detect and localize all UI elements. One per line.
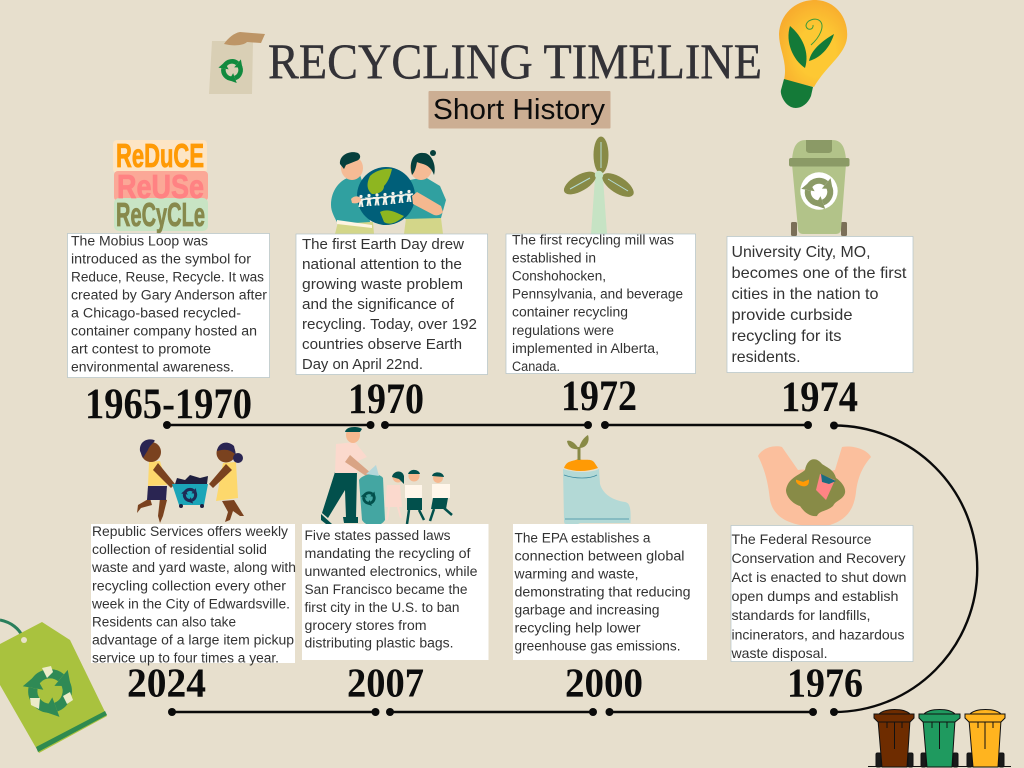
year: 1974: 1974 (781, 374, 858, 421)
panel: 2000 (513, 524, 707, 660)
icon: reduce reuse recycle sticker: ReDuCE (116, 137, 204, 174)
panel: 1976: The Federal Resource (732, 531, 872, 547)
panel: 1976 (730, 526, 913, 662)
panel: 1965-1970: introduced as the symbol for (71, 252, 252, 266)
panel: 1976: waste disposal. (730, 645, 828, 661)
panel: 1976: open dumps and establish (732, 588, 898, 604)
panel: 1972: Canada. (512, 359, 560, 374)
panel: 1970 (296, 234, 488, 374)
subtitle: short history: Short History (433, 94, 606, 126)
panel: 2024: week in the City of Edwardsville. (91, 596, 290, 612)
panel: 1974: residents. (732, 349, 800, 366)
panel: 2024: recycling collection every other (92, 578, 287, 594)
panel: 2007: mandating the recycling of (304, 546, 471, 561)
panel: 1965-1970: environmental awareness. (71, 360, 234, 374)
panel: 2007: San Francisco became the (304, 582, 468, 597)
icon: man and children collecting bottles (321, 427, 452, 526)
icon: reduce reuse recycle sticker: ReCyCLe (116, 196, 205, 233)
panel: 2024: Residents can also take (92, 614, 236, 630)
panel: 1976: incinerators, and hazardous (732, 626, 904, 642)
year: 1965-1970: 1965-1970 (85, 381, 252, 428)
panel: 2024: collection of residential solid (92, 542, 267, 557)
panel: 2000: garbage and increasing (514, 603, 660, 618)
panel: 1974: cities in the nation to (732, 286, 879, 303)
panel: 1970: countries observe Earth (302, 337, 462, 353)
year: 1972: 1972 (561, 373, 637, 420)
year: 1976: 1976 (787, 660, 863, 706)
panel: 1970: The first Earth Day drew (302, 237, 464, 253)
panel: 1972: established in (512, 250, 596, 265)
panel: 1970: and the significance of (302, 297, 455, 313)
panel: 1970: national attention to the (302, 257, 462, 273)
icon: wind turbine (560, 136, 637, 234)
title: RECYCLING TIMELINE (268, 33, 762, 89)
year: 2024: 2024 (127, 660, 206, 706)
panel: 2000: recycling help lower (514, 621, 641, 636)
panel: 1965-1970: a Chicago-based recycled- (71, 306, 241, 320)
panel: 1974: becomes one of the first (732, 265, 907, 282)
panel: 1976: standards for landfills, (732, 607, 870, 623)
panel: 1972: container recycling (512, 305, 628, 320)
icon: two kids carrying a recycling basket (137, 439, 244, 523)
panel: 1965-1970 (68, 234, 270, 378)
panel: 2007: Five states passed laws (304, 528, 451, 543)
panel: 1972: Pennsylvania, and beverage (512, 287, 683, 302)
timeline: connectors and curve (163, 421, 977, 716)
panel: 1965-1970: container company hosted an (71, 324, 257, 338)
panel: 1976: Act is enacted to shut down (732, 569, 906, 585)
panel: 2024: Republic Services offers weekly (92, 524, 288, 539)
icon: boot with seedling (563, 435, 631, 524)
icon: two people holding the earth (331, 150, 446, 234)
panel: 1965-1970: art contest to promote (71, 342, 211, 356)
icon: green recycling bin (789, 140, 850, 236)
panel: 2000: The EPA establishes a (514, 531, 651, 546)
panel: 1965-1970: The Mobius Loop was (71, 234, 208, 248)
panel: 1976: Conservation and Recovery (732, 550, 906, 566)
panel: 1974 (727, 236, 913, 372)
panel: 1972: Conshohocken, (512, 268, 606, 284)
panel: 1974: University City, MO, (732, 244, 870, 261)
panel: 1972: The first recycling mill was (512, 232, 674, 247)
panel: 2024: waste and yard waste, along with (91, 560, 296, 575)
panel: 1974: recycling for its (732, 328, 842, 345)
panel: 2007: unwanted electronics, while (304, 564, 478, 579)
panel: 2007: distributing plastic bags. (304, 636, 454, 650)
year: 1970: 1970 (348, 376, 424, 423)
year: 2007: 2007 (347, 660, 424, 706)
panel: 1970: growing waste problem (302, 277, 463, 293)
panel: 2007: grocery stores from (304, 618, 426, 633)
panel: 2000: warming and waste, (513, 567, 638, 582)
panel: 1965-1970: Reduce, Reuse, Recycle. It was (71, 270, 264, 284)
panel: 1972: regulations were (512, 323, 614, 338)
icon: reduce reuse recycle sticker (113, 137, 208, 233)
icon: paper bag with recycling symbol (209, 32, 265, 94)
panel: 2000: demonstrating that reducing (514, 585, 690, 600)
panel: 1972 (506, 232, 696, 374)
panel: 2024: advantage of a large item pickup (92, 632, 294, 648)
icon: hands holding compost (758, 446, 871, 526)
icon: light bulb with leaves (779, 0, 847, 108)
icon: three wheelie bins (868, 710, 1011, 767)
panel: 1965-1970: created by Gary Anderson after (71, 288, 268, 302)
panel: 1970: Day on April 22nd. (302, 357, 423, 373)
icon: green recycling tag (0, 620, 107, 753)
panel: 2000: greenhouse gas emissions. (514, 638, 680, 654)
panel: 2000: connection between global (514, 549, 684, 564)
panel: 2007 (302, 524, 488, 660)
year: 2000: 2000 (565, 660, 643, 706)
panel: 1972: implemented in Alberta, (512, 341, 659, 356)
panel: 1974: provide curbside (732, 307, 853, 324)
panel: 2007: first city in the U.S. to ban (304, 600, 460, 615)
panel: 2024 (91, 524, 296, 666)
icon: reduce reuse recycle sticker: ReUSe (117, 168, 204, 205)
panel: 2024: service up to four times a year. (92, 650, 279, 666)
panel: 1970: recycling. Today, over 192 (302, 317, 477, 333)
